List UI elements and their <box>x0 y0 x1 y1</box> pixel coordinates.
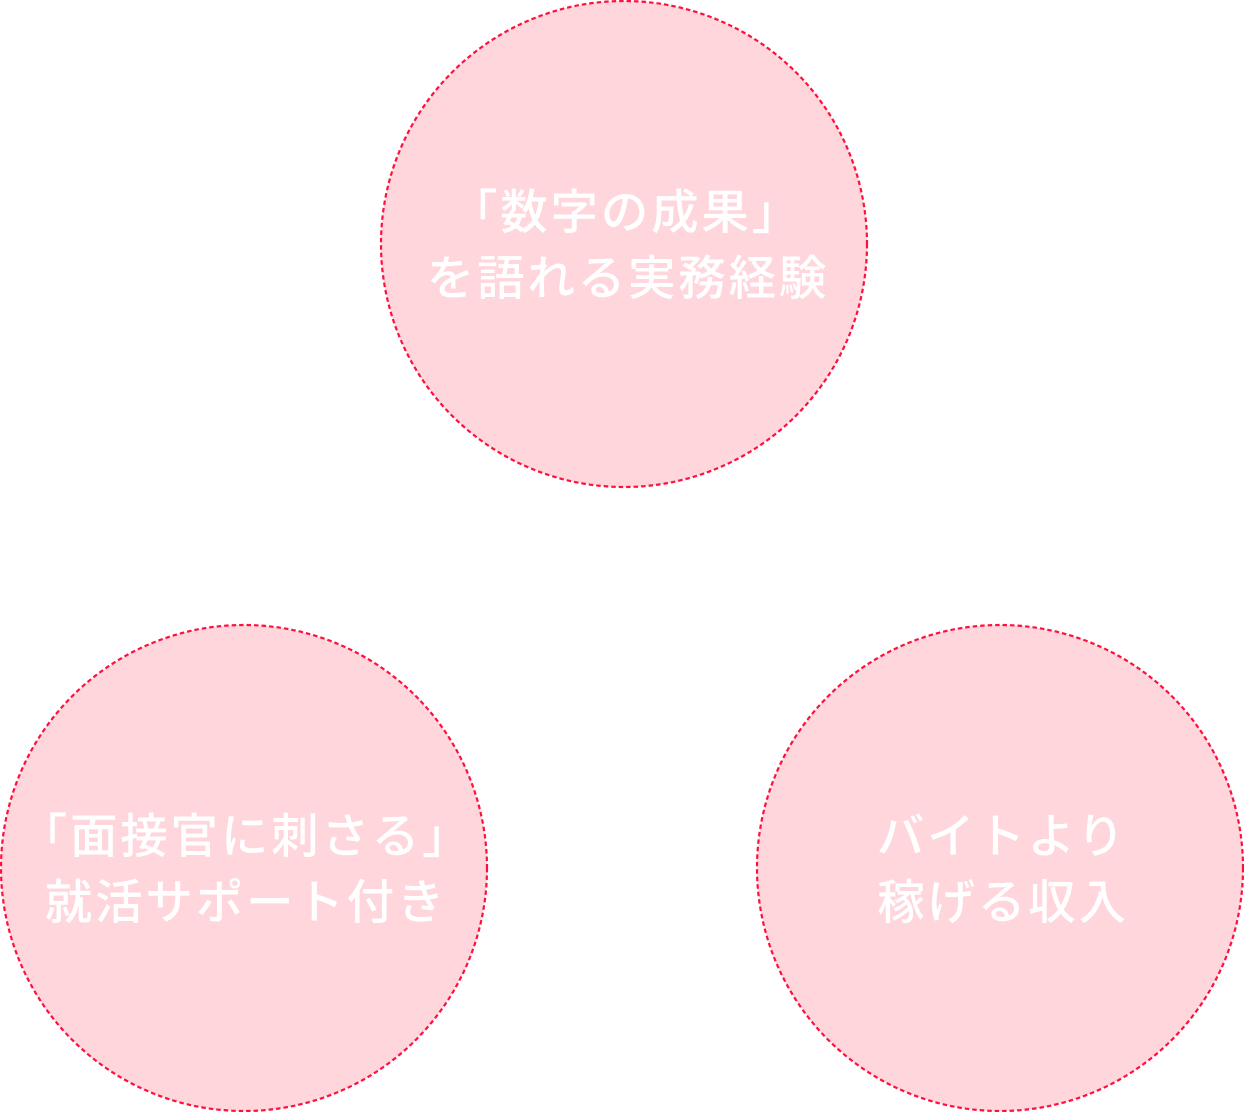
panel: top circle, practical experience: を語れる実務経験 <box>427 253 829 306</box>
panel: bottom right circle, income <box>757 625 1243 1111</box>
panel: bottom left circle, interview support <box>1 625 487 1111</box>
panel: top circle, practical experience <box>381 1 867 487</box>
panel: bottom left circle, interview support: 就活サポート付き <box>45 877 447 930</box>
panel: top circle, practical experience: 「数字の成果」 <box>450 187 802 240</box>
panel: bottom right circle, income: 稼げる収入 <box>877 877 1129 930</box>
panel: bottom left circle, interview support: 「面接官に刺さる」 <box>20 811 472 864</box>
panel: bottom right circle, income: バイトより <box>877 811 1127 864</box>
